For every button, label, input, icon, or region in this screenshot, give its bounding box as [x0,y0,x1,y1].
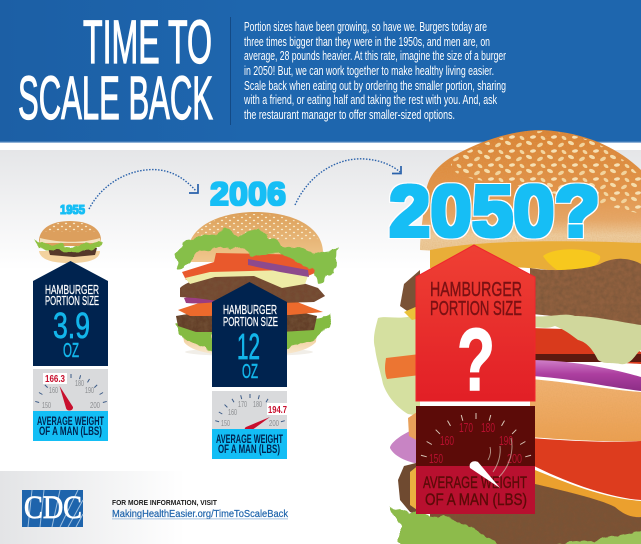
portion size arrow 2006: HAMBURGER [223,303,277,317]
portion size arrow 2050 [416,245,535,409]
CDC logo: CDC [24,490,82,526]
panel: 2006 [212,282,287,459]
portion size arrow 2006: OZ [242,361,258,383]
intro paragraph: with a friend, or eating half and taking the rest with you. And, ask [243,93,497,107]
panel: 1955 [33,261,108,441]
weight gauge 2050: 150 [429,451,443,466]
onion [530,360,641,391]
year label: 2050: 2050? [389,172,600,252]
title: TIME TO [83,8,212,76]
title [18,8,213,132]
intro paragraph [243,20,506,122]
portion size arrow 1955: HAMBURGER [45,283,99,297]
year label: 1955: 1955 [60,202,85,217]
weight gauge 2050: 160 [440,433,454,448]
portion size arrow 1955: OZ [63,340,79,362]
more information text [112,500,289,520]
lower patty [430,484,641,544]
lower lettuce [175,312,332,352]
page background gradient [0,150,641,270]
onion upper [248,259,309,277]
lower tomato [178,300,323,316]
weight gauge 2050: 200 [507,451,522,466]
1955 burger illustration [36,221,103,263]
arrow: 1955 to 2006 [89,170,198,209]
weight gauge 1955: 190 [85,386,94,395]
header band [0,0,641,143]
weight gauge 2006: 200 [269,419,279,428]
arrow: 2006 to 2050 [295,159,401,205]
weight gauge 2006: 180 [253,400,262,409]
portion size arrow 2006 [212,282,287,387]
cheese [430,241,641,275]
gauge needle 2050 [470,438,512,488]
intro paragraph: average, 28 pounds heavier. At this rate, imagine the size of a burger [244,49,506,63]
portion size arrow 1955: PORTION SIZE [45,294,99,308]
middle bun [530,379,641,441]
2006 burger illustration [175,212,337,356]
intro paragraph: Portion sizes have been growing, so have we. Burgers today are [244,20,487,34]
weight gauge 2006: 160 [228,408,237,417]
intro paragraph: Scale back when eating out by ordering the smaller portion, sharing [244,79,506,93]
sesame seeds [451,131,641,214]
upper patty [530,259,641,326]
weight gauge 2006: 194.7 [268,405,287,416]
weight caption 1955: OF A MAN (LBS) [39,426,102,438]
lettuce [530,315,641,364]
portion size arrow 1955: 3.9 [53,305,90,346]
lower cheese [530,468,641,518]
more information text: MakingHealthEasier.org/TimeToScaleBack [112,509,289,520]
weight gauge 1955 [33,369,108,411]
weight gauge 2050: 170 [459,420,473,435]
2050 giant burger illustration [374,130,641,544]
portion size arrow 2050: PORTION SIZE [430,298,522,320]
cheese [185,270,308,288]
upper tomato [182,253,317,280]
year label: 2006: 2006 [210,176,286,212]
more information text: FOR MORE INFORMATION, VISIT [112,500,218,507]
title: SCALE BACK [18,64,213,132]
portion size arrow 1955 [33,261,108,366]
footer background [0,471,185,544]
portion size arrow 2006: PORTION SIZE [223,315,278,329]
portion size arrow 2050: ? [457,310,495,409]
tomato upper [530,328,641,364]
weight caption 2006: AVERAGE WEIGHT [216,434,283,446]
weight gauge 1955: 160 [49,386,58,395]
upper lettuce [175,228,337,284]
weight gauge 1955: 166.3 [45,374,65,385]
weight gauge 1955: 180 [75,379,84,388]
weight caption 1955: AVERAGE WEIGHT [37,416,104,428]
weight gauge 2006 [212,391,287,433]
weight caption 2050 [416,466,535,514]
weight caption 2050: AVERAGE WEIGHT [423,473,527,492]
weight caption 2006 [212,429,287,459]
weight gauge 2006: 150 [221,419,230,428]
weight gauge 2006: 170 [238,400,247,409]
intro paragraph: three times bigger than they were in the 1950s, and men are, on [244,35,490,49]
left side lettuce [374,312,420,416]
weight gauge 2050: 180 [481,420,495,435]
weight gauge 2050 [416,406,535,466]
weight gauge 1955: 200 [90,401,100,410]
portion size arrow 2050: HAMBURGER [430,279,522,301]
upper patty [180,275,325,304]
weight caption 1955 [33,411,108,441]
portion size arrow 2006: 12 [237,326,260,367]
panel: 2050 [416,245,535,514]
top bun [188,212,323,262]
lower patty [176,312,317,332]
weight gauge 1955: 150 [42,401,51,410]
weight caption 2006: OF A MAN (LBS) [218,444,280,456]
weight gauge 2050: 190 [499,433,513,448]
intro paragraph: the restaurant manager to offer smaller-sized options. [244,108,455,122]
intro paragraph: in 2050! But, we can work together to make healthy living easier. [244,64,494,78]
lower tomato [530,438,641,500]
onion [184,294,226,303]
bottom bun [182,328,317,356]
weight caption 2050: OF A MAN (LBS) [425,490,527,509]
bottom lettuce [390,507,641,544]
top bun [420,130,641,262]
